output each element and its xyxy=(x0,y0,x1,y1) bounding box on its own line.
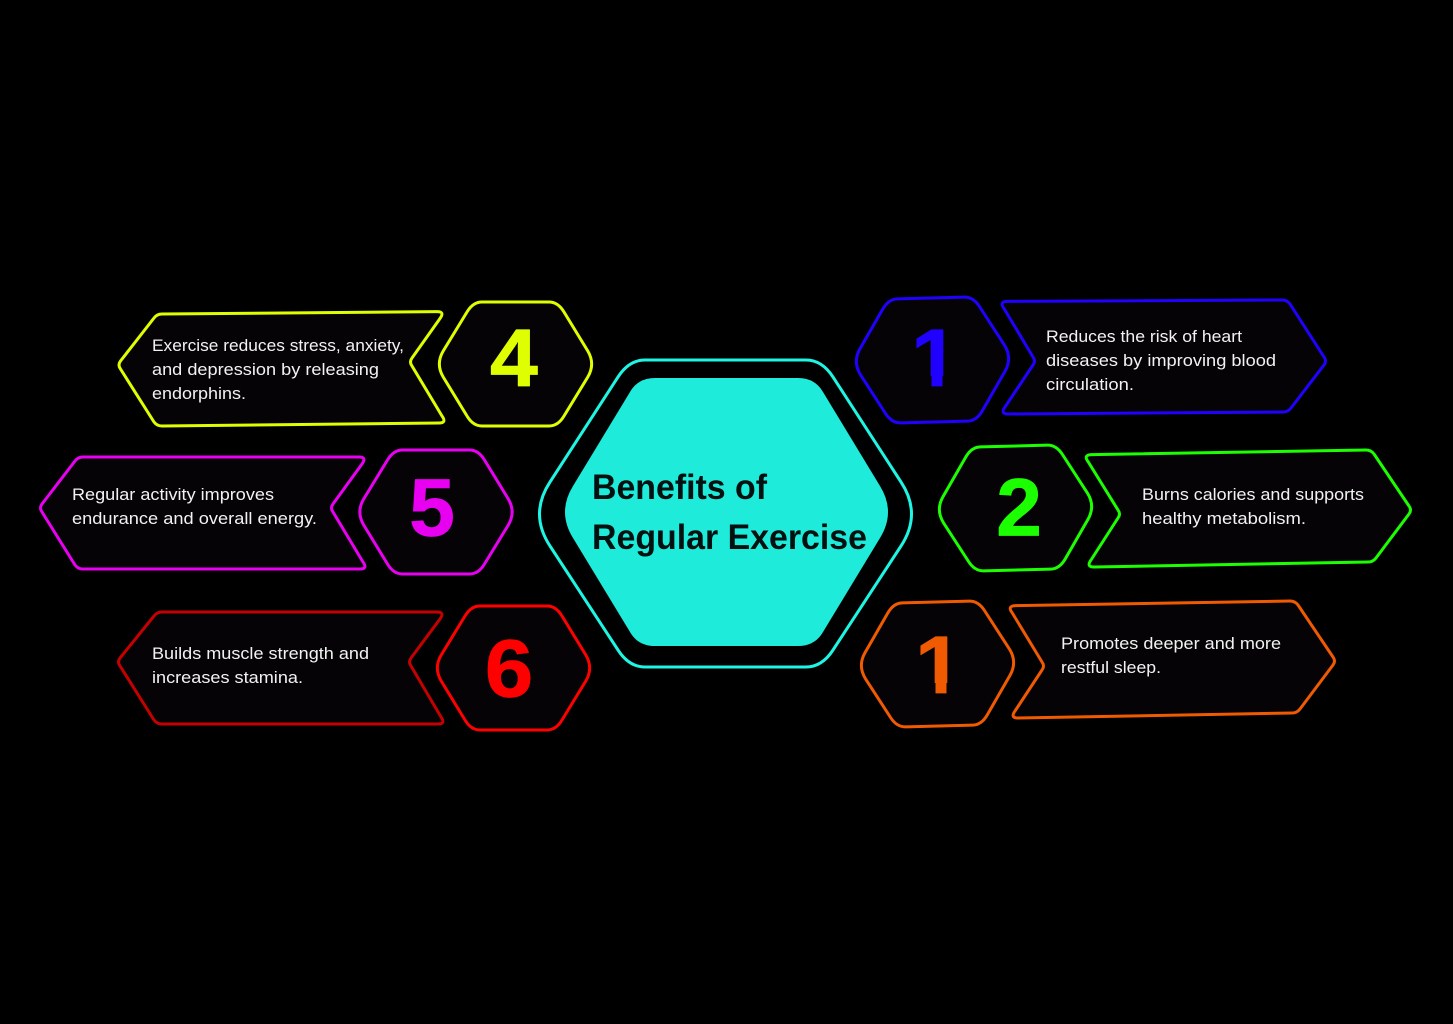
central hexagon xyxy=(540,360,912,667)
text 2 xyxy=(1142,485,1364,528)
text 4: endorphins. xyxy=(152,384,246,403)
text 6: increases stamina. xyxy=(152,668,303,687)
number 4: 4 xyxy=(490,312,538,404)
text 6 xyxy=(152,644,369,687)
arrow panel 4 xyxy=(119,312,444,426)
text 1: Reduces the risk of heart xyxy=(1046,327,1242,346)
text 1 xyxy=(1046,327,1276,394)
number 2: 2 xyxy=(996,462,1042,554)
text 1: circulation. xyxy=(1046,375,1134,394)
text 4: Exercise reduces stress, anxiety, xyxy=(152,336,404,355)
text 2: healthy metabolism. xyxy=(1142,509,1306,528)
number hexagon 2 xyxy=(938,444,1093,572)
text 5: endurance and overall energy. xyxy=(72,509,317,528)
arrow panel 5 xyxy=(40,457,365,569)
number 1 (orange): 1 xyxy=(915,619,963,711)
number 5: 5 xyxy=(409,462,455,554)
item 1: heart health xyxy=(855,296,1326,424)
title xyxy=(592,468,867,557)
item 2: metabolism xyxy=(938,444,1410,572)
number hexagon 4 xyxy=(439,302,592,426)
item 3: sleep xyxy=(860,600,1334,728)
arrow panel 2 xyxy=(1086,450,1410,567)
text 1: diseases by improving blood xyxy=(1046,351,1276,370)
text 2: Burns calories and supports xyxy=(1142,485,1364,504)
title: Regular Exercise xyxy=(592,518,867,557)
number hexagon 1 (orange) xyxy=(860,600,1015,728)
text 3 xyxy=(1061,634,1281,677)
arrow panel 1 (orange) xyxy=(1010,601,1334,718)
text 3: Promotes deeper and more xyxy=(1061,634,1281,653)
number hexagon 6 xyxy=(437,606,590,730)
text 4: and depression by releasing xyxy=(152,360,379,379)
number hexagon 1 xyxy=(855,296,1010,424)
title: Benefits of xyxy=(592,468,767,507)
central hexagon outer outline xyxy=(540,360,912,667)
text 5: Regular activity improves xyxy=(72,485,274,504)
item 6: muscle strength xyxy=(118,606,590,730)
number hexagon 5 xyxy=(360,450,512,574)
text 4 xyxy=(152,336,404,403)
central hexagon fill xyxy=(565,378,888,646)
text 6: Builds muscle strength and xyxy=(152,644,369,663)
item 4: stress relief xyxy=(119,302,592,426)
text 3: restful sleep. xyxy=(1061,658,1161,677)
arrow panel 1 xyxy=(1002,300,1326,414)
text 5 xyxy=(72,485,317,528)
item 5: endurance xyxy=(40,450,512,574)
arrow panel 6 xyxy=(118,612,443,724)
number 6: 6 xyxy=(485,623,533,714)
number 1: 1 xyxy=(911,312,959,404)
